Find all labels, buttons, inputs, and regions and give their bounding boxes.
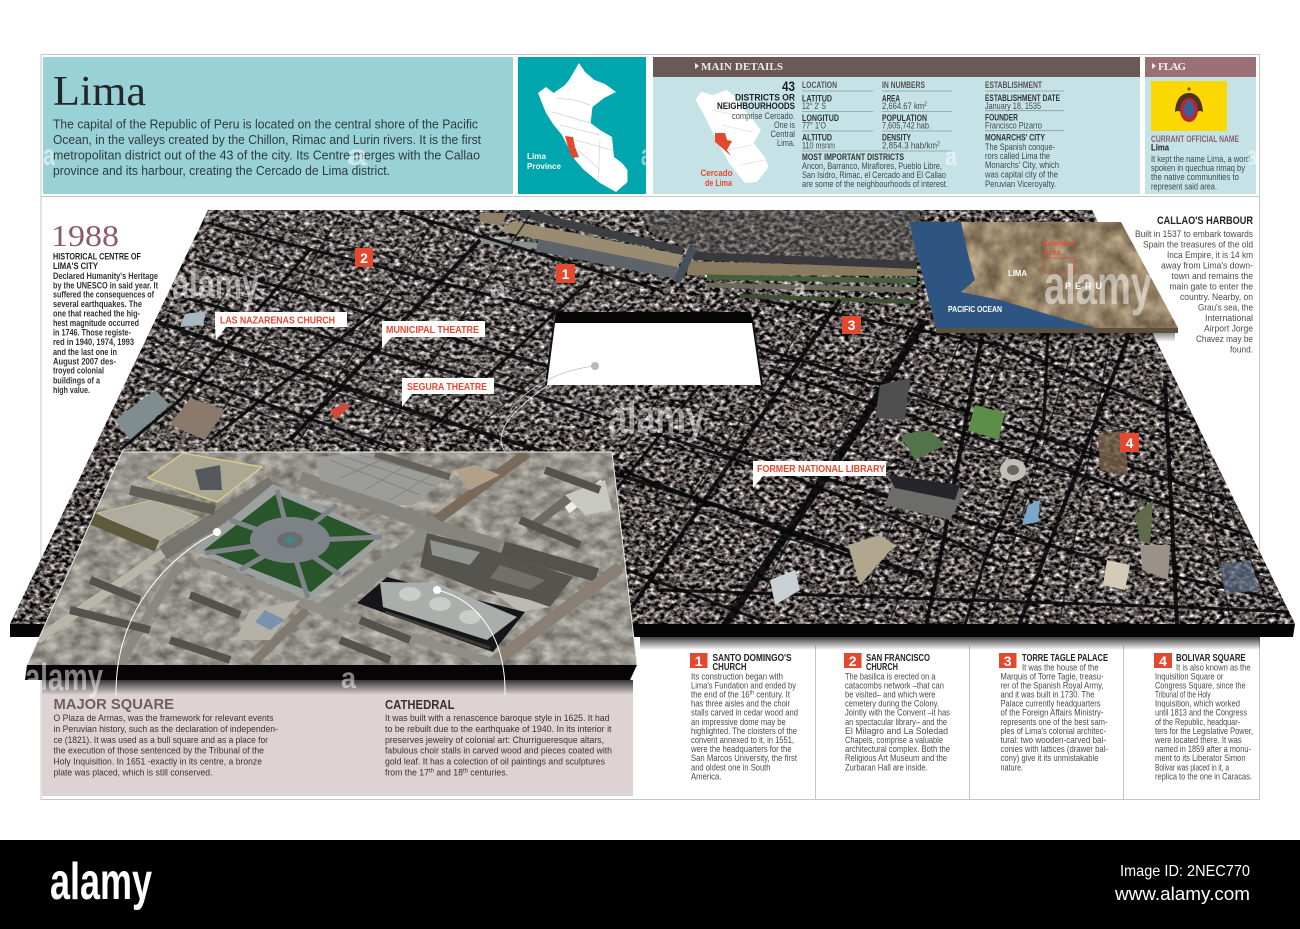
introduction text — [53, 116, 481, 178]
panel: title and introduction — [43, 57, 513, 194]
section: Santo Domingo's Church: stalls carved in cedar wood and — [691, 708, 798, 718]
establishment column — [984, 80, 1064, 189]
number marker 4 — [1120, 433, 1139, 452]
cathedral text: CATHEDRAL — [385, 697, 455, 712]
flag of Lima — [1151, 81, 1227, 131]
cathedral text: It was built with a renascence baroque style in 1625. It had — [385, 713, 609, 724]
section: Bolivar Square: of the Republic, headquar- — [1155, 717, 1240, 728]
establishment column: ESTABLISHMENT DATE — [985, 93, 1060, 103]
section: Torre Tagle Palace: of the Foreign Affairs Ministry- — [1000, 708, 1104, 718]
major square plaza — [193, 484, 387, 601]
section: San Francisco Church: Jointly with the Convent –it has — [845, 708, 950, 718]
department borders — [552, 98, 612, 182]
section: Santo Domingo's Church: Its construction began with — [691, 672, 783, 682]
callout: Callao's Harbour: Grau's sea, the — [1198, 302, 1253, 314]
watermarks: a — [347, 139, 367, 172]
in numbers column: 7,605,742 hab. — [882, 120, 931, 130]
historical centre text: in 1746. Those registe- — [53, 328, 131, 338]
section: Santo Domingo's Church: th — [750, 690, 754, 696]
inset roads — [37, 453, 620, 665]
in numbers column: AREA — [882, 94, 900, 104]
inset shadow — [42, 680, 633, 695]
3D map: Callao area — [905, 220, 1185, 342]
section: Santo Domingo's Church: century. It — [754, 690, 790, 700]
section: Torre Tagle Palace: conies with lattices (drawer bal- — [1000, 744, 1108, 755]
major square text: Holy Inquisition. In 1651 -exactly in its centre, a bronze — [54, 756, 262, 768]
43 districts text: Lima. — [777, 138, 795, 148]
historical centre text: hest magnitude occurred — [53, 318, 139, 328]
flag caption: the native communities to — [1151, 172, 1239, 182]
section: Santo Domingo's Church: convent annexed to it, in 1551, — [691, 735, 794, 746]
location column: 77° 1'O — [802, 120, 826, 130]
section: Torre Tagle Palace: nature. — [1000, 762, 1023, 774]
leader: cathedral — [433, 586, 505, 695]
section: San Francisco Church: The basilica is erected on a — [845, 672, 936, 682]
ocean — [909, 222, 1096, 328]
cathedral text: gold leaf. It has a colection of oil paintings and sculptures — [385, 756, 605, 768]
section: Bolivar Square: 4 — [1159, 653, 1167, 669]
number marker 3 — [842, 316, 861, 334]
main details heading: MAIN DETAILS — [701, 61, 783, 73]
section: San Francisco Church: El Milagro and La Soledad — [845, 726, 948, 737]
image id: Image ID: 2NEC770 — [1120, 863, 1250, 880]
extended area marker: Area — [1043, 248, 1061, 257]
section: Torre Tagle Palace: tural: two wooden-carved bal- — [1000, 735, 1106, 746]
most important districts: are some of the neighbourhoods of interest. — [802, 179, 948, 189]
map of Peru — [538, 63, 628, 192]
title: Lima — [53, 69, 146, 115]
streets — [120, 212, 1290, 625]
year 1988: 1988 — [51, 218, 119, 253]
panel: Peru map with Lima Province — [518, 57, 646, 194]
extended area marker — [1043, 239, 1075, 272]
watermarks: alamy — [608, 391, 705, 443]
location column: ALTITUD — [802, 132, 832, 142]
location column — [802, 80, 952, 151]
land — [905, 220, 1185, 332]
watermarks: a — [641, 139, 651, 172]
map side edge — [10, 624, 1295, 637]
cathedral text: from the 17 — [385, 768, 433, 778]
callout: Callao's Harbour: Chavez may be — [1196, 334, 1253, 345]
section: Torre Tagle Palace: 3 — [1004, 653, 1012, 669]
historical centre text: and the last one in — [53, 347, 117, 357]
cathedral complex — [357, 533, 573, 652]
section: Bolivar Square: replica to the one in Caracas. — [1155, 772, 1252, 782]
cathedral text: centuries. — [468, 768, 508, 778]
section: Torre Tagle Palace: It was the house of the — [1022, 662, 1098, 674]
flag caption: Lima — [1151, 142, 1170, 152]
watermarks — [25, 139, 1257, 699]
inset outline — [27, 452, 637, 665]
historical centre text: high value. — [53, 385, 90, 395]
section: Bolivar Square: named in 1859 after a monu- — [1155, 744, 1251, 755]
historical centre text: red in 1940, 1974, 1993 — [53, 337, 134, 347]
footer: stock image bar — [0, 840, 1300, 929]
section: Santo Domingo's Church — [690, 653, 798, 782]
most important districts: Ancon, Barranco, Miraflores, Pueblo Libre, — [802, 161, 942, 171]
section: Santo Domingo's Church: CHURCH — [712, 662, 746, 673]
establishment column: Monarchs' City, which — [985, 160, 1059, 170]
Cercado map: Cercado — [700, 168, 733, 179]
historical centre text: several earthquakes. The — [53, 299, 142, 309]
number marker 2: 2 — [360, 250, 368, 266]
section: Bolivar Square: Bolivar was placed in it, a — [1155, 762, 1229, 774]
aerial image — [0, 205, 1300, 630]
historical centre text — [53, 271, 158, 395]
map edge — [936, 328, 1178, 333]
section: Bolivar Square: It is also known as the — [1176, 662, 1251, 674]
section: Torre Tagle Palace: Marquis of Torre Tagle, treasu- — [1000, 672, 1104, 682]
watermarks: alamy — [1044, 253, 1152, 316]
in numbers column: POPULATION — [882, 113, 927, 123]
historical centre heading — [53, 252, 141, 271]
section: San Francisco Church: catacombs network –that can — [845, 680, 944, 692]
major square text: the execution of those sentenced by the Tribunal of the — [54, 746, 264, 756]
Lima label: LIMA — [1008, 268, 1027, 278]
callout: Former National Library — [753, 461, 886, 488]
callout: Segura Theatre: SEGURA THEATRE — [407, 382, 487, 393]
satellite map of historic centre — [0, 205, 1300, 650]
cathedral text: th — [463, 768, 468, 774]
section: Torre Tagle Palace — [999, 653, 1108, 774]
website: www.alamy.com — [1114, 884, 1250, 904]
section: Bolivar Square — [1154, 653, 1253, 782]
inset buildings — [70, 453, 612, 660]
major square text: O Plaza de Armas, was the framework for relevant events — [54, 713, 274, 724]
section: San Francisco Church: be visited– and which were — [845, 690, 936, 700]
callout: Callao's Harbour: country. Nearby, on — [1180, 292, 1253, 303]
section: Bolivar Square: ment to its Liberator Simon — [1155, 753, 1246, 764]
43 districts text: Central — [770, 129, 795, 139]
watermarks: a — [490, 273, 506, 304]
callout: Callao's Harbour: International — [1205, 313, 1253, 324]
callout: Municipal Theatre — [382, 321, 485, 348]
establishment column: FOUNDER — [985, 112, 1018, 122]
most important districts: MOST IMPORTANT DISTRICTS — [802, 152, 904, 162]
section: San Francisco Church: an spectacular library– and the — [845, 717, 947, 728]
fine block grid — [130, 210, 1280, 620]
section: San Francisco Church: Zurbaran Hall are inside. — [845, 762, 928, 774]
watermarks: a — [43, 139, 55, 172]
leader line from hole — [501, 362, 599, 452]
historical centre heading: LIMA'S CITY — [53, 261, 98, 271]
panel: main details — [653, 57, 1140, 194]
bright roofs and squares — [115, 311, 1260, 605]
in numbers column: IN NUMBERS — [882, 80, 925, 90]
historical centre heading: HISTORICAL CENTRE OF — [53, 252, 141, 262]
Cercado map — [696, 90, 769, 189]
43 districts text: 43 — [782, 78, 795, 94]
43 districts text: comprise Cercado. — [732, 111, 795, 121]
location column: 110 msnm — [802, 140, 835, 150]
historical centre text: Declared Humanity's Heritage — [53, 271, 158, 281]
location column: 12° 2' S — [802, 101, 826, 111]
section: Torre Tagle Palace: TORRE TAGLE PALACE — [1022, 653, 1108, 664]
section: Santo Domingo's Church: San Marcos University, the first — [691, 753, 797, 764]
section: Torre Tagle Palace: rer of the Spanish Royal Army, — [1000, 680, 1104, 692]
section: Santo Domingo's Church: and oldest one in South — [691, 762, 770, 774]
section: Santo Domingo's Church: 1 — [695, 653, 703, 669]
section: San Francisco Church: Religious Art Museum and the — [845, 753, 947, 764]
section: Torre Tagle Palace: Palace currently headquarters — [1000, 698, 1101, 710]
number marker 4: 4 — [1126, 435, 1134, 451]
callout: Callao's Harbour: Inca Empire, it is 14 km — [1167, 250, 1253, 261]
number marker 1: 1 — [562, 266, 570, 282]
section: San Francisco Church: SAN FRANCISCO — [866, 653, 930, 664]
section: Torre Tagle Palace: represents one of the best sam- — [1000, 717, 1108, 728]
establishment column: ESTABLISHMENT — [985, 80, 1042, 90]
establishment column: Peruvian Viceroyalty. — [985, 179, 1056, 189]
callout: Municipal Theatre: MUNICIPAL THEATRE — [386, 325, 479, 336]
cathedral text: to be rebuilt due to the earthquake of 1940. In its interior it — [385, 724, 612, 735]
inset: aerial view of major square — [20, 450, 645, 695]
watermarks: a — [945, 141, 957, 171]
43 districts text: DISTRICTS OR — [735, 92, 795, 102]
43 districts text — [717, 78, 795, 148]
watermarks: a — [341, 662, 356, 695]
section: Torre Tagle Palace: and it was built in 1730. The — [1000, 690, 1094, 700]
historical centre text: suffered the consequences of — [53, 290, 155, 300]
in numbers column — [882, 80, 952, 150]
major square text: in Peruvian history, such as the declaration of independen- — [54, 724, 278, 735]
extended area marker: Extended — [1043, 239, 1075, 248]
leader: major square — [116, 528, 221, 695]
43 districts text: NEIGHBOURHOODS — [717, 101, 795, 111]
in numbers column: 2 — [924, 102, 928, 108]
section: Bolivar Square: Inquisition Square or — [1155, 672, 1223, 682]
section: Santo Domingo's Church: SANTO DOMINGO'S — [712, 653, 792, 664]
in numbers column: 2,664.67 km — [882, 101, 932, 111]
in numbers column: DENSITY — [882, 132, 911, 142]
establishment column: The Spanish conque- — [985, 142, 1055, 152]
Lima Province label: Lima — [527, 151, 546, 161]
historical centre text: by the UNESCO in said year. It — [53, 280, 158, 290]
callout: Segura Theatre — [402, 378, 494, 407]
callout: Callao's Harbour — [1135, 215, 1253, 356]
cathedral text: fabulous choir stalls in carved wood and pieces coated with — [385, 746, 612, 756]
number marker 3: 3 — [848, 317, 856, 333]
in numbers column: 2,854.3 hab/km — [882, 140, 944, 150]
callout: Callao's Harbour: town and remains the — [1172, 271, 1253, 282]
callout: Callao's Harbour: CALLAO'S HARBOUR — [1157, 215, 1253, 227]
river Rimac — [480, 210, 920, 304]
establishment column: was capital city of the — [984, 170, 1058, 180]
Peru country label: PERU — [1065, 281, 1102, 291]
major square text: plate was placed, which is still conserved. — [54, 768, 212, 778]
flag caption: It kept the name Lima, a word — [1151, 154, 1250, 164]
Lima Province label — [527, 151, 561, 171]
establishment column: January 18, 1535 — [985, 101, 1041, 111]
major square text: ce (1821). It was used as a bull square and as a place for — [54, 735, 268, 746]
most important districts: San Isidro, Rimac, el Cercado and El Callao — [802, 170, 946, 180]
cathedral text: and 18 — [434, 768, 463, 778]
historical centre text: troyed colonial — [53, 366, 104, 376]
section: Torre Tagle Palace: ples of Lima's colonial architec- — [1000, 726, 1106, 737]
section: San Francisco Church: CHURCH — [866, 662, 898, 673]
major square text: MAJOR SQUARE — [54, 696, 174, 713]
page frame — [41, 54, 1260, 800]
inset side edge — [25, 665, 637, 680]
section: Bolivar Square: BOLIVAR SQUARE — [1176, 653, 1246, 664]
Pacific Ocean label: PACIFIC OCEAN — [948, 304, 1002, 314]
callout: Callao's Harbour: Spain the treasures of the old — [1143, 240, 1253, 250]
major square text — [54, 696, 278, 778]
panel: major square and cathedral text — [42, 680, 633, 796]
section: San Francisco Church: Chapels, comprise a valuable — [845, 735, 943, 746]
introduction text: The capital of the Republic of Peru is located on the central shore of the Pacific — [53, 116, 478, 132]
callout: Las Nazarenas Church: LAS NAZARENAS CHURCH — [220, 316, 335, 326]
watermarks: a — [1247, 140, 1257, 171]
Lima Province label: Province — [527, 161, 561, 171]
cathedral text: th — [429, 768, 434, 774]
historical centre text: one that reached the hig- — [53, 308, 140, 318]
flag caption: spoken in quechua rimaq by — [1151, 163, 1245, 173]
section: Santo Domingo's Church: an impressive dome may be — [691, 717, 786, 728]
introduction text: metropolitan district out of the 43 of the city. Its Centre merges with the Callao — [53, 148, 480, 162]
callout: Callao's Harbour: found. — [1230, 344, 1253, 356]
Lima province highlight — [565, 136, 579, 158]
introduction text: province and its harbour, creating the Cercado de Lima district. — [53, 163, 390, 178]
section: San Francisco Church — [844, 653, 950, 774]
map shadow — [640, 637, 1260, 650]
historical centre text: August 2007 des- — [53, 356, 116, 366]
introduction text: Ocean, in the valleys created by the Chillon, Rimac and Lurin rivers. It is the first — [53, 132, 481, 147]
section: Santo Domingo's Church: has three aisles and the choir — [691, 698, 790, 710]
callout: Callao's Harbour: Airport Jorge — [1204, 324, 1253, 334]
section: Bolivar Square: Tribunal of the Holy — [1155, 690, 1211, 700]
43 districts text: One is — [774, 120, 795, 130]
callout: Callao's Harbour: away from Lima's down- — [1161, 260, 1253, 272]
section: Torre Tagle Palace: cony) give it its unmistakable — [1000, 753, 1098, 764]
Cercado map: de Lima — [705, 178, 733, 189]
panel: flag — [1145, 57, 1256, 194]
flag caption — [1151, 134, 1250, 192]
cathedral text — [385, 697, 612, 778]
cathedral text: preserves jewelry of colonial art: Churrigueresque altars, — [385, 735, 604, 746]
section: Bolivar Square: until 1813 and the Congress — [1155, 708, 1247, 718]
section: San Francisco Church: cemetery during the Colony. — [845, 698, 939, 710]
section: Santo Domingo's Church: the end of the 16 — [691, 690, 762, 700]
most important districts — [802, 152, 948, 189]
flag caption: CURRANT OFFICIAL NAME — [1151, 134, 1239, 144]
section: Santo Domingo's Church: were the headquarters for the — [690, 744, 792, 755]
location column: LATITUD — [802, 94, 832, 104]
number marker 2 — [355, 248, 373, 267]
number marker 1 — [556, 264, 575, 283]
callout: Former National Library: FORMER NATIONAL LIBRARY — [757, 464, 885, 475]
section: Santo Domingo's Church: America. — [691, 772, 722, 782]
section: San Francisco Church: 2 — [849, 653, 857, 669]
establishment column: rors called Lima the — [985, 151, 1050, 161]
callout: historic year text — [51, 218, 158, 395]
callout: Callao's Harbour: main gate to enter the — [1170, 282, 1253, 292]
establishment column: MONARCHS' CITY — [985, 132, 1045, 142]
callout: Las Nazarenas Church — [215, 312, 347, 340]
section: Bolivar Square: Congress Square, since the — [1155, 680, 1246, 692]
section: Bolivar Square: ters for the Legislative Power, — [1155, 726, 1253, 737]
flag caption: represent said area. — [1151, 182, 1217, 192]
section: Santo Domingo's Church: Lima's Fundation and ended by — [691, 680, 796, 692]
white cut-out for map hole — [546, 312, 762, 385]
location column: LONGITUD — [802, 113, 839, 123]
alamy logo: alamy — [50, 853, 152, 911]
in numbers column: 2 — [937, 142, 941, 148]
callout: Callao's Harbour: Built in 1537 to embark towards — [1135, 229, 1253, 240]
historical centre text: buildings of a — [53, 375, 101, 385]
section: Bolivar Square: Inquisition, which worked — [1155, 698, 1240, 710]
section: Bolivar Square: were located there. It was — [1154, 735, 1242, 746]
flag heading: FLAG — [1158, 61, 1186, 73]
section: Santo Domingo's Church: highlighted. The cloisters of the — [691, 726, 797, 737]
watermarks: a — [793, 272, 806, 302]
section: San Francisco Church: architectural complex. Both the — [845, 744, 950, 755]
watermarks: alamy — [172, 260, 259, 307]
watermarks: alamy — [25, 657, 103, 699]
location column: LOCATION — [802, 80, 837, 90]
establishment column: Francisco Pizarro — [985, 120, 1042, 130]
